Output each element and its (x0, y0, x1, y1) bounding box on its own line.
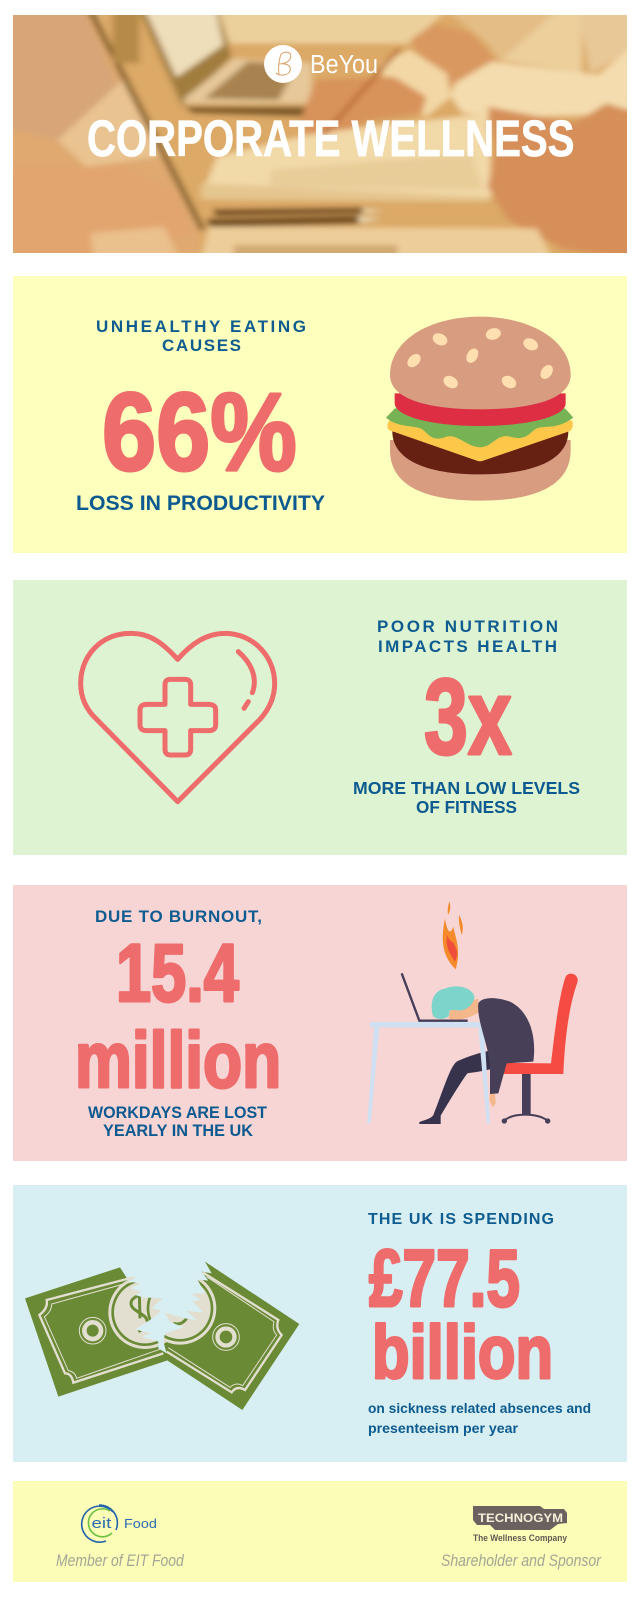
logo: EIT Food: eit (92, 1515, 112, 1532)
panel: partners footer (13, 1481, 627, 1582)
heading: due to burnout: DUE TO BURNOUT, (95, 907, 262, 926)
caption: more than low levels of fitness: OF FITNESS (416, 797, 517, 817)
icon: torn banknote (25, 1253, 299, 1410)
heading: poor nutrition impacts health: IMPACTS HEALTH (378, 637, 557, 656)
stat: 15.4 million (75, 927, 281, 1105)
heading: the UK is spending: THE UK IS SPENDING (368, 1211, 554, 1228)
heading: poor nutrition impacts health (377, 617, 558, 656)
heading: poor nutrition impacts health: POOR NUTRITION (377, 617, 558, 636)
stat: 66%: 66% (102, 372, 297, 494)
caption: workdays are lost (88, 1104, 267, 1140)
caption: more than low levels of fitness (353, 778, 580, 817)
stat: £77.5 billion: £77.5 (369, 1233, 520, 1324)
stat: 15.4 million: million (75, 1017, 281, 1105)
heading: unhealthy eating causes: UNHEALTHY EATING (96, 317, 306, 336)
caption: sickness related absences: presenteeism per year (368, 1420, 519, 1436)
icon: burger (386, 317, 573, 501)
title: CORPORATE WELLNESS (87, 109, 574, 167)
label: shareholder and sponsor: Shareholder and Sponsor (441, 1552, 602, 1570)
icon: heart with medical cross (81, 633, 275, 802)
logo: Technogym (473, 1506, 568, 1544)
logo: EIT Food (82, 1505, 157, 1542)
logo: BeYou (264, 45, 378, 83)
caption: more than low levels of fitness: MORE THAN LOW LEVELS (353, 778, 580, 798)
panel: burnout (13, 885, 627, 1161)
heading: unhealthy eating causes (96, 317, 306, 355)
stat: £77.5 billion (369, 1233, 553, 1394)
stat: £77.5 billion: billion (372, 1310, 553, 1394)
photo: people working at a desk with orange tint (4, 7, 639, 260)
heading: unhealthy eating causes: CAUSES (162, 336, 241, 355)
caption: loss in productivity: LOSS IN PRODUCTIVITY (76, 492, 325, 515)
stat: 3x: 3x (424, 657, 512, 778)
caption: sickness related absences (368, 1400, 591, 1436)
caption: workdays are lost: WORKDAYS ARE LOST (88, 1104, 267, 1122)
caption: workdays are lost: YEARLY IN THE UK (103, 1122, 253, 1140)
panel: header banner (4, 7, 639, 260)
illustration: burned-out worker at desk (367, 902, 578, 1124)
logo: Technogym: The Wellness Company (473, 1533, 568, 1544)
label: member of EIT Food: Member of EIT Food (56, 1552, 185, 1570)
panel: sickness cost (13, 1185, 627, 1462)
logo: EIT Food: Food (124, 1517, 157, 1531)
panel: poor nutrition (13, 580, 627, 855)
panel: unhealthy eating (13, 276, 627, 553)
stat: 15.4 million: 15.4 (116, 927, 239, 1019)
logo: Technogym: TECHNOGYM (478, 1513, 563, 1525)
caption: sickness related absences: on sickness related absences and (368, 1400, 591, 1416)
logo: BeYou: BeYou (310, 51, 378, 79)
